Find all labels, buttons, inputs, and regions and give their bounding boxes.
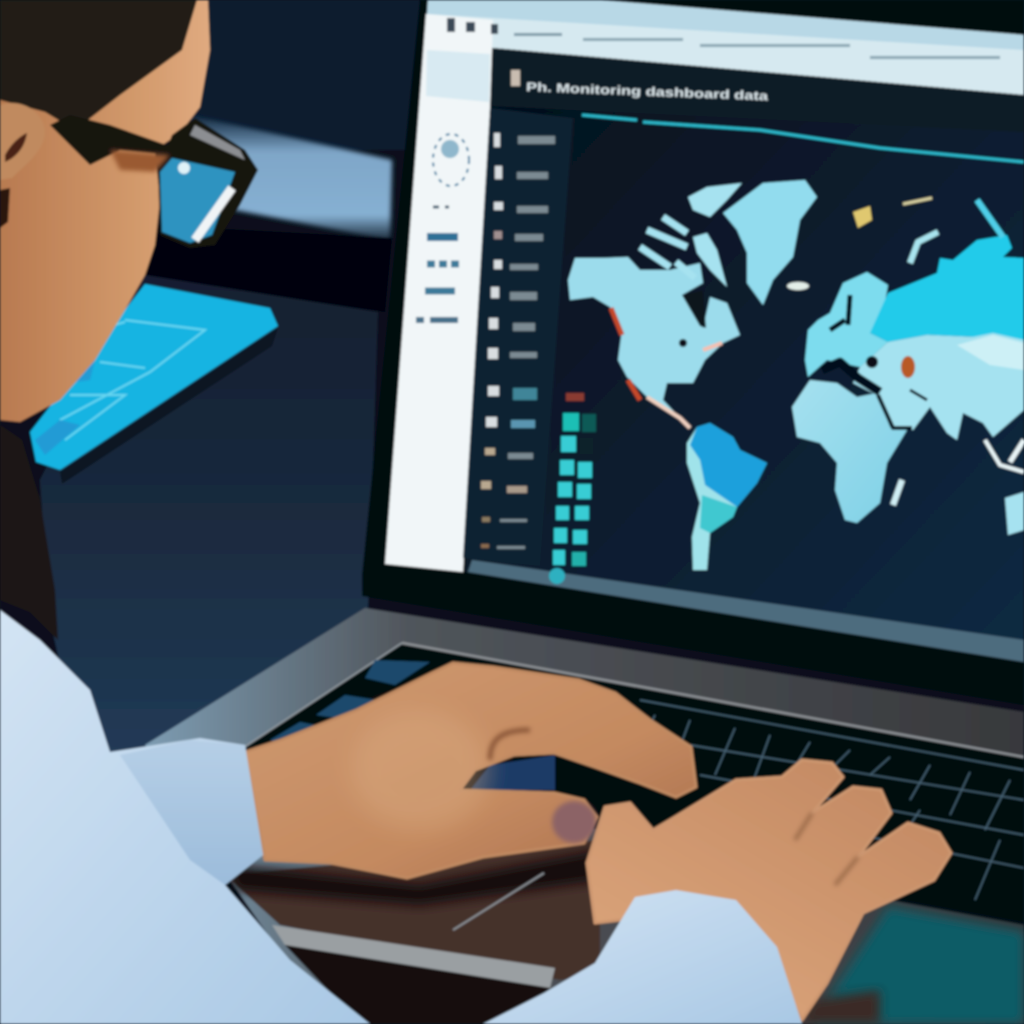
dashboard screen xyxy=(385,0,1024,662)
map: russia xyxy=(870,235,1024,342)
map: madagascar xyxy=(893,480,902,505)
left hand xyxy=(245,663,696,878)
bottom status bar xyxy=(468,560,1024,662)
right hand xyxy=(587,760,951,1020)
map: europe and scandinavia xyxy=(805,272,888,377)
reflection lower right xyxy=(812,907,1024,1024)
main dark panel xyxy=(465,48,1024,642)
left white sidebar xyxy=(385,14,493,572)
shadow under left hand xyxy=(230,850,600,905)
face and neck xyxy=(0,0,210,422)
map: south america xyxy=(687,423,767,570)
blue key behind left hand xyxy=(470,755,555,790)
trackpad edge line xyxy=(453,873,544,930)
laptop screen bezel xyxy=(362,0,1024,705)
world map xyxy=(568,180,1024,570)
map: australia xyxy=(1005,492,1024,535)
map: africa xyxy=(792,380,907,523)
menu labels xyxy=(497,136,555,549)
sidebar sketch icons xyxy=(416,134,469,320)
laptop base xyxy=(145,608,1024,1024)
dark reflection patch xyxy=(800,990,880,1024)
browser strip highlight xyxy=(427,0,1024,50)
panel title: Ph. Monitoring dashboard data xyxy=(526,80,770,103)
left sleeve and torso xyxy=(0,610,370,1024)
menu icons xyxy=(481,133,503,548)
tablet on desk xyxy=(30,284,278,484)
map: arctic russian islands and iceland xyxy=(787,198,1003,290)
map: hudson and us coast details xyxy=(611,290,722,428)
desk surface xyxy=(40,275,378,752)
hair xyxy=(0,0,197,130)
laptop front edge xyxy=(272,925,555,988)
laptop underside xyxy=(285,945,550,1024)
status bar indicator xyxy=(549,568,565,584)
teal legend squares xyxy=(553,413,596,566)
cheek shadow under temple arm xyxy=(110,150,170,172)
top browser bar xyxy=(426,0,1024,95)
menu column xyxy=(463,108,573,566)
map: central asia highlight xyxy=(957,335,1024,370)
keyboard xyxy=(240,643,1024,925)
hair braid xyxy=(0,425,58,640)
map: north america xyxy=(568,257,740,418)
laptop palm rest and trackpad xyxy=(225,840,600,980)
browser toolbar icons xyxy=(447,18,1000,59)
map: greenland xyxy=(723,180,817,305)
map: arctic islands xyxy=(640,183,742,287)
right sleeve xyxy=(483,890,802,1024)
sidebar pale header xyxy=(426,50,490,102)
legend header swatch xyxy=(566,393,584,401)
panel title band xyxy=(491,48,1024,132)
ear xyxy=(0,103,45,228)
teal progress line xyxy=(515,115,1024,162)
panel title icon xyxy=(511,70,520,86)
map: south asia xyxy=(853,333,1024,440)
map: seas xyxy=(822,295,927,428)
glasses xyxy=(50,115,258,248)
map: hotspots and southeast asia glint xyxy=(866,356,1024,472)
